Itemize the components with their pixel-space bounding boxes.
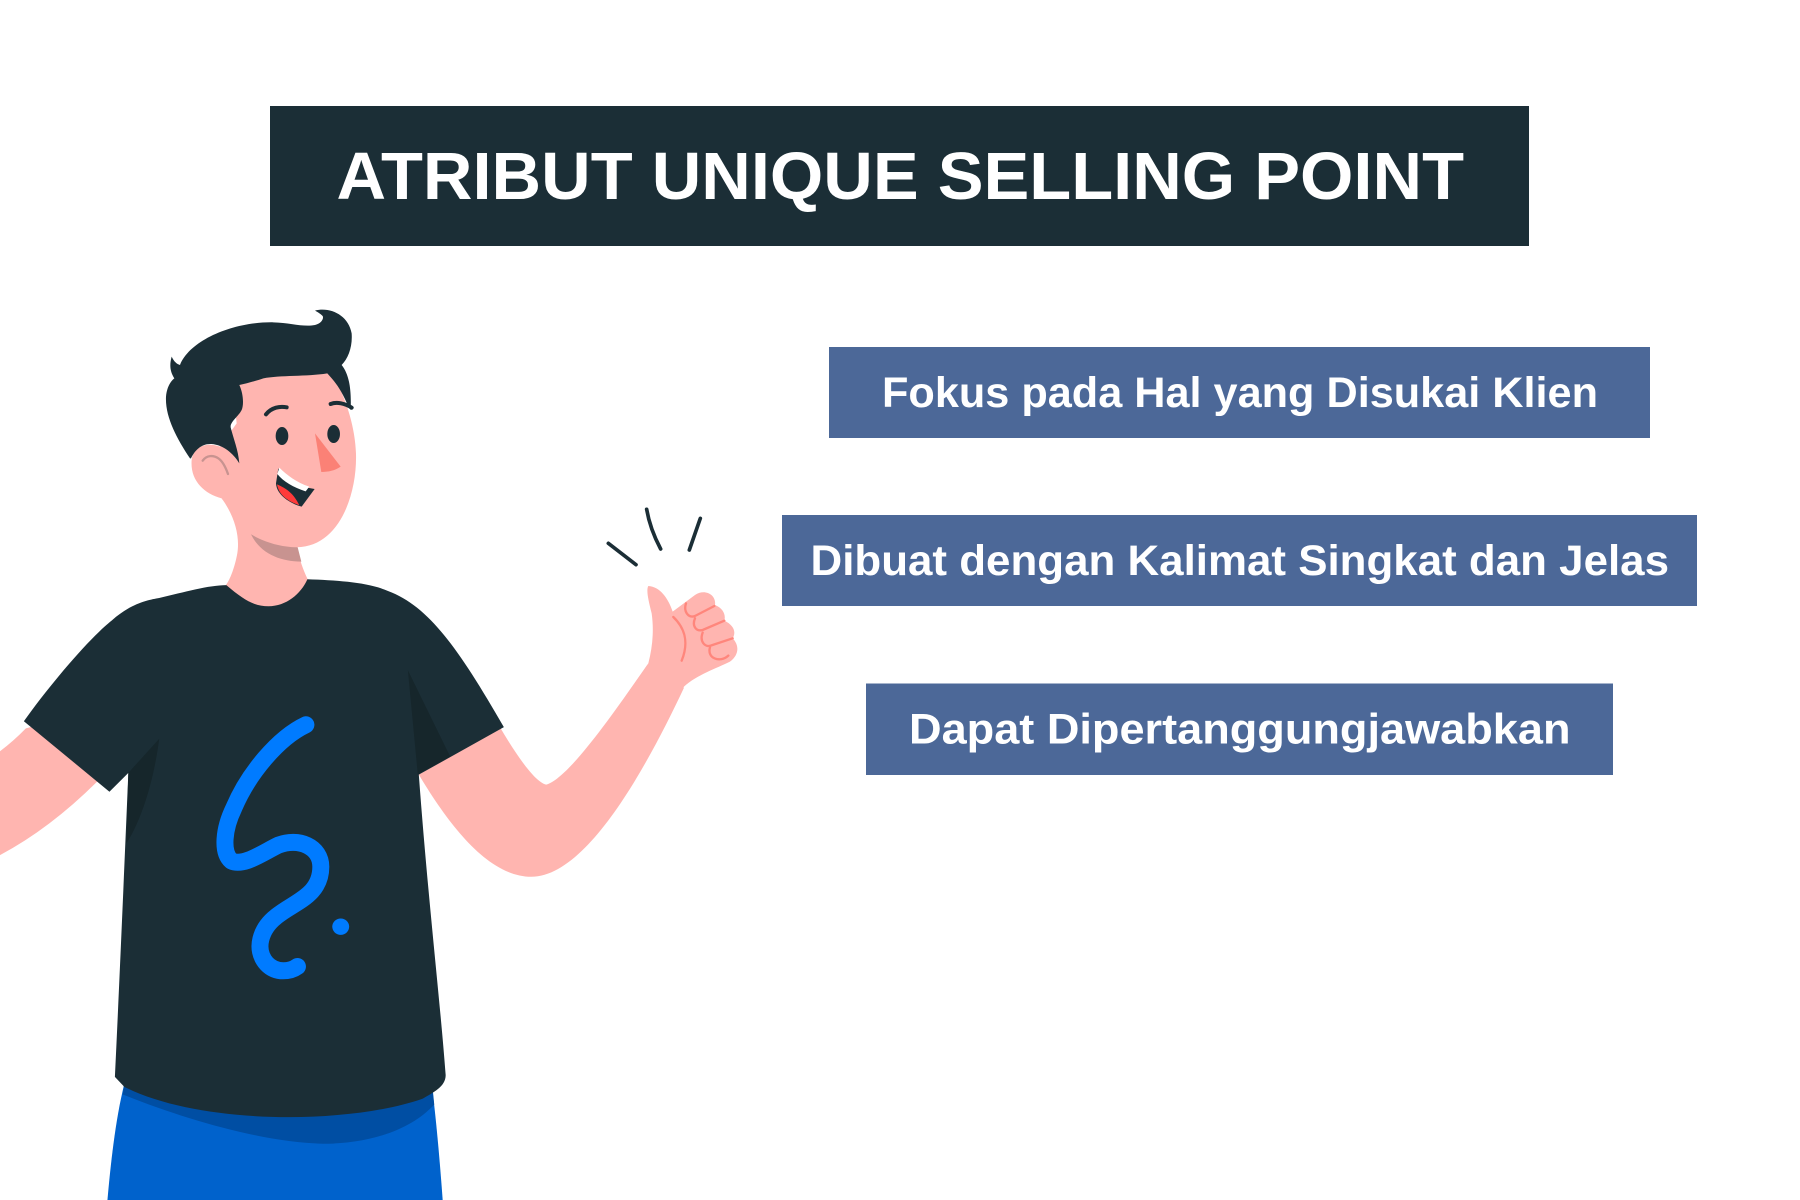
nose — [315, 433, 341, 472]
shirt squiggle logo — [225, 725, 349, 971]
smiling mouth — [276, 468, 315, 507]
title — [270, 106, 1529, 246]
attribute box: short and clear sentences: Dibuat dengan Kalimat Singkat dan Jelas — [810, 537, 1669, 585]
attribute box: focus on client — [829, 347, 1650, 438]
attribute box: accountable — [866, 684, 1613, 775]
attribute box: focus on client: Fokus pada Hal yang Disukai Klien — [882, 369, 1598, 417]
finger lines — [673, 603, 733, 661]
hair — [166, 310, 352, 463]
neck — [222, 498, 308, 610]
character illustration — [0, 310, 737, 1200]
face and ear — [192, 368, 356, 547]
body: arms, trousers and t-shirt — [0, 579, 684, 1200]
hand — [616, 586, 737, 710]
trousers — [107, 1081, 443, 1200]
head — [166, 310, 356, 562]
thumbs-up hand and spark lines — [608, 509, 737, 710]
eyebrows — [266, 403, 352, 414]
t-shirt — [24, 579, 504, 1117]
title: ATRIBUT UNIQUE SELLING POINT — [336, 139, 1464, 214]
attribute box: short and clear sentences — [782, 515, 1697, 606]
ear line — [203, 456, 228, 474]
attribute box: accountable: Dapat Dipertanggungjawabkan — [909, 706, 1570, 754]
right arm — [419, 664, 684, 877]
sleeve shadows — [126, 670, 450, 843]
spark lines — [608, 509, 700, 565]
eyes — [276, 425, 340, 445]
neck shadow — [251, 534, 301, 562]
left arm — [0, 726, 114, 855]
